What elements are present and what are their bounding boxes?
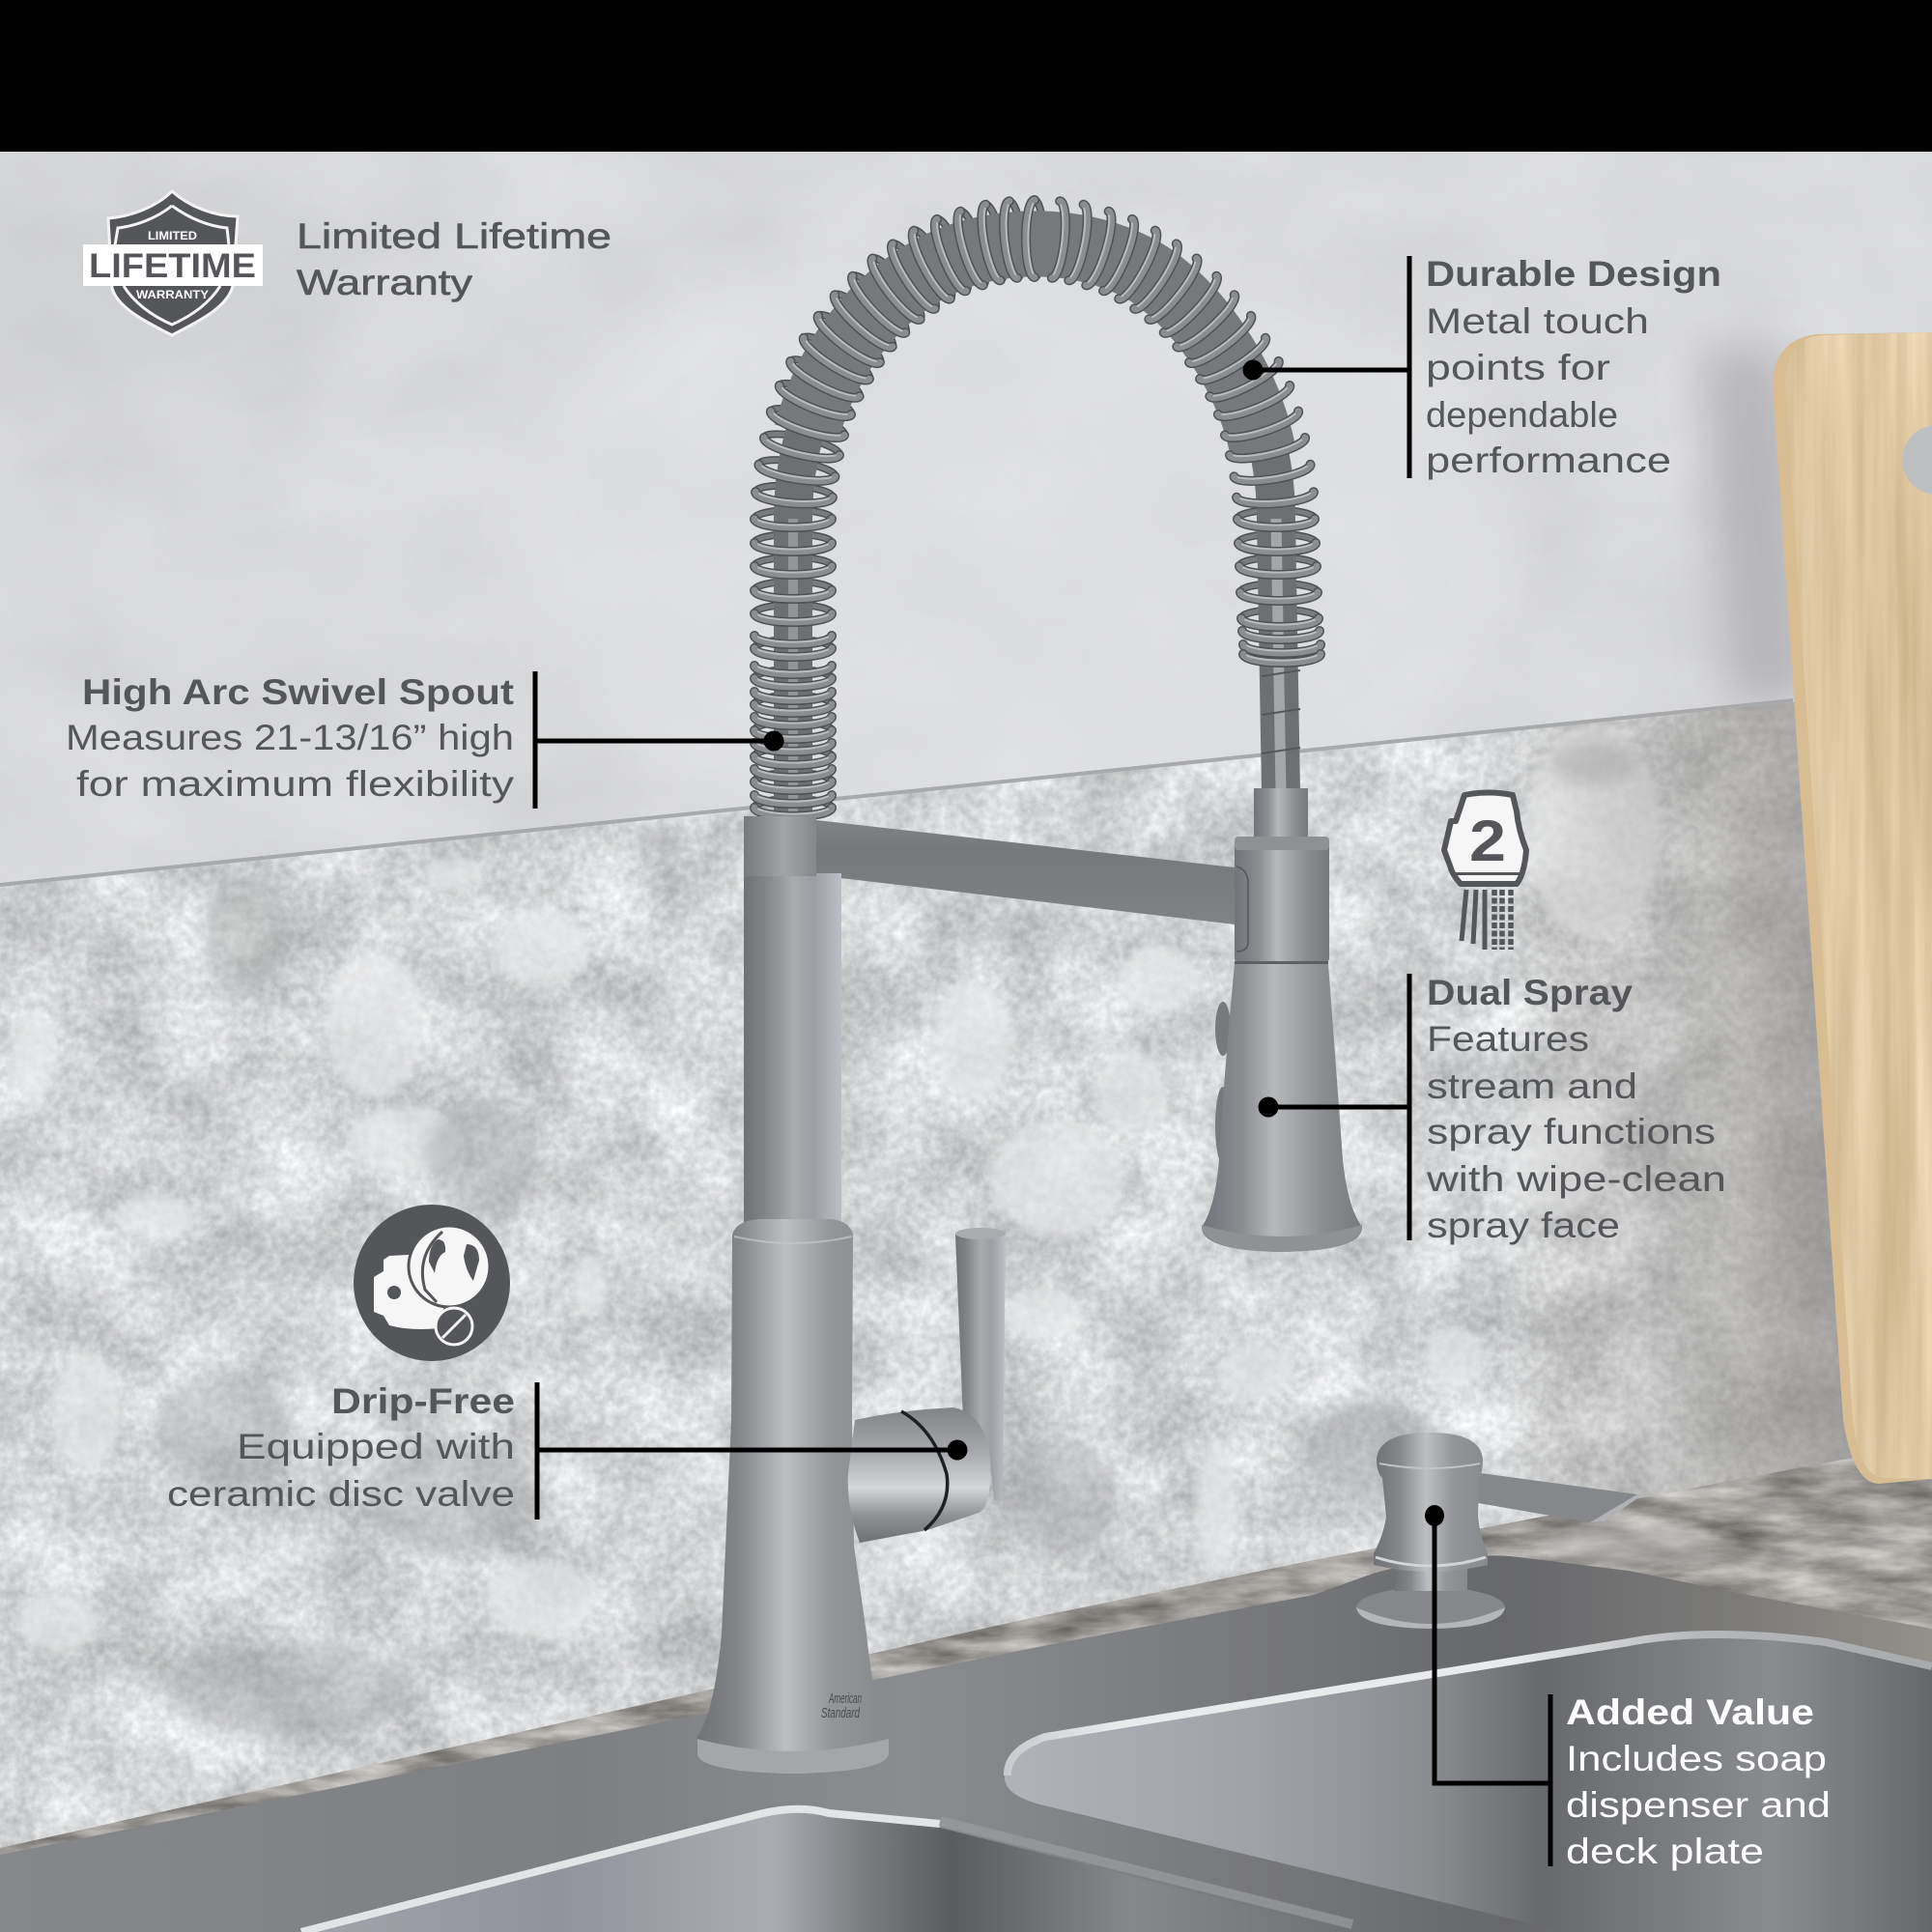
callout: dual spray: with wipe-clean	[1426, 1158, 1726, 1199]
callout: dual spray: Features	[1427, 1018, 1589, 1059]
sink deck	[0, 1555, 1932, 1932]
warranty badge: LIFETIME	[89, 247, 256, 285]
logo text: Standard	[821, 1705, 860, 1721]
handle lever	[955, 1228, 1006, 1500]
warranty text: Limited Lifetime	[297, 215, 611, 256]
callout: added value: Added Value	[1566, 1691, 1814, 1732]
callout: dual spray: stream and	[1427, 1065, 1637, 1106]
stone backsplash	[0, 676, 1932, 1874]
callout: durable design: Metal touch	[1426, 300, 1649, 341]
sprayer head	[1202, 788, 1362, 1252]
callout: high arc swivel spout: Measures 21-13/16” high	[66, 717, 514, 757]
callout: high arc swivel spout	[66, 671, 784, 809]
icon: dual spray head: 2	[1469, 809, 1506, 873]
warranty badge: LIMITED	[148, 231, 197, 242]
callout: durable design: dependable	[1426, 394, 1618, 435]
callout: durable design: performance	[1426, 440, 1671, 480]
logo text	[821, 1690, 862, 1721]
faucet	[697, 200, 1642, 1774]
wall and backsplash seam	[0, 698, 1793, 887]
black top band	[0, 0, 1932, 152]
handle hub	[848, 1407, 990, 1543]
callout: dual spray: Dual Spray	[1427, 972, 1633, 1012]
callout: durable design	[1242, 253, 1721, 480]
swing arm	[816, 820, 1235, 924]
stone countertop	[0, 1458, 1932, 1855]
callout: durable design: points for	[1426, 347, 1610, 387]
icon: dual spray head	[1444, 792, 1526, 950]
upper pillar	[744, 816, 841, 1231]
callout: added value: Includes soap	[1566, 1738, 1827, 1778]
callout: drip-free: Drip-Free	[331, 1380, 515, 1421]
callout: dual spray	[1258, 972, 1726, 1245]
icon: ceramic disc valve	[354, 1205, 510, 1361]
coil back turns	[754, 200, 1319, 808]
right sink basin	[1005, 1631, 1932, 1932]
warranty badge: WARRANTY	[136, 290, 209, 301]
callout: durable design: Durable Design	[1426, 253, 1721, 294]
callout: high arc swivel spout: for maximum flexibility	[76, 763, 514, 804]
callout: added value: dispenser and	[1566, 1784, 1831, 1825]
left sink basin	[301, 1809, 1352, 1932]
wall panel	[0, 152, 1932, 905]
warranty text	[297, 215, 611, 302]
coil front turns	[754, 200, 1321, 816]
callout: added value	[1425, 1505, 1831, 1871]
logo text: American	[828, 1690, 862, 1707]
callout: added value: deck plate	[1566, 1831, 1764, 1871]
lower body	[697, 1219, 889, 1774]
soap dispenser	[1356, 1433, 1642, 1629]
callout: dual spray: spray functions	[1427, 1111, 1716, 1151]
callout: drip-free	[167, 1380, 968, 1520]
callout: drip-free: ceramic disc valve	[167, 1473, 515, 1514]
callout: high arc swivel spout: High Arc Swivel Spout	[82, 671, 515, 712]
cutting board	[1768, 328, 1932, 1488]
warranty text: Warranty	[297, 262, 472, 302]
callout: drip-free: Equipped with	[237, 1426, 515, 1466]
callout: dual spray: spray face	[1427, 1205, 1620, 1245]
inner hose	[793, 239, 1300, 816]
warranty badge	[83, 191, 263, 335]
